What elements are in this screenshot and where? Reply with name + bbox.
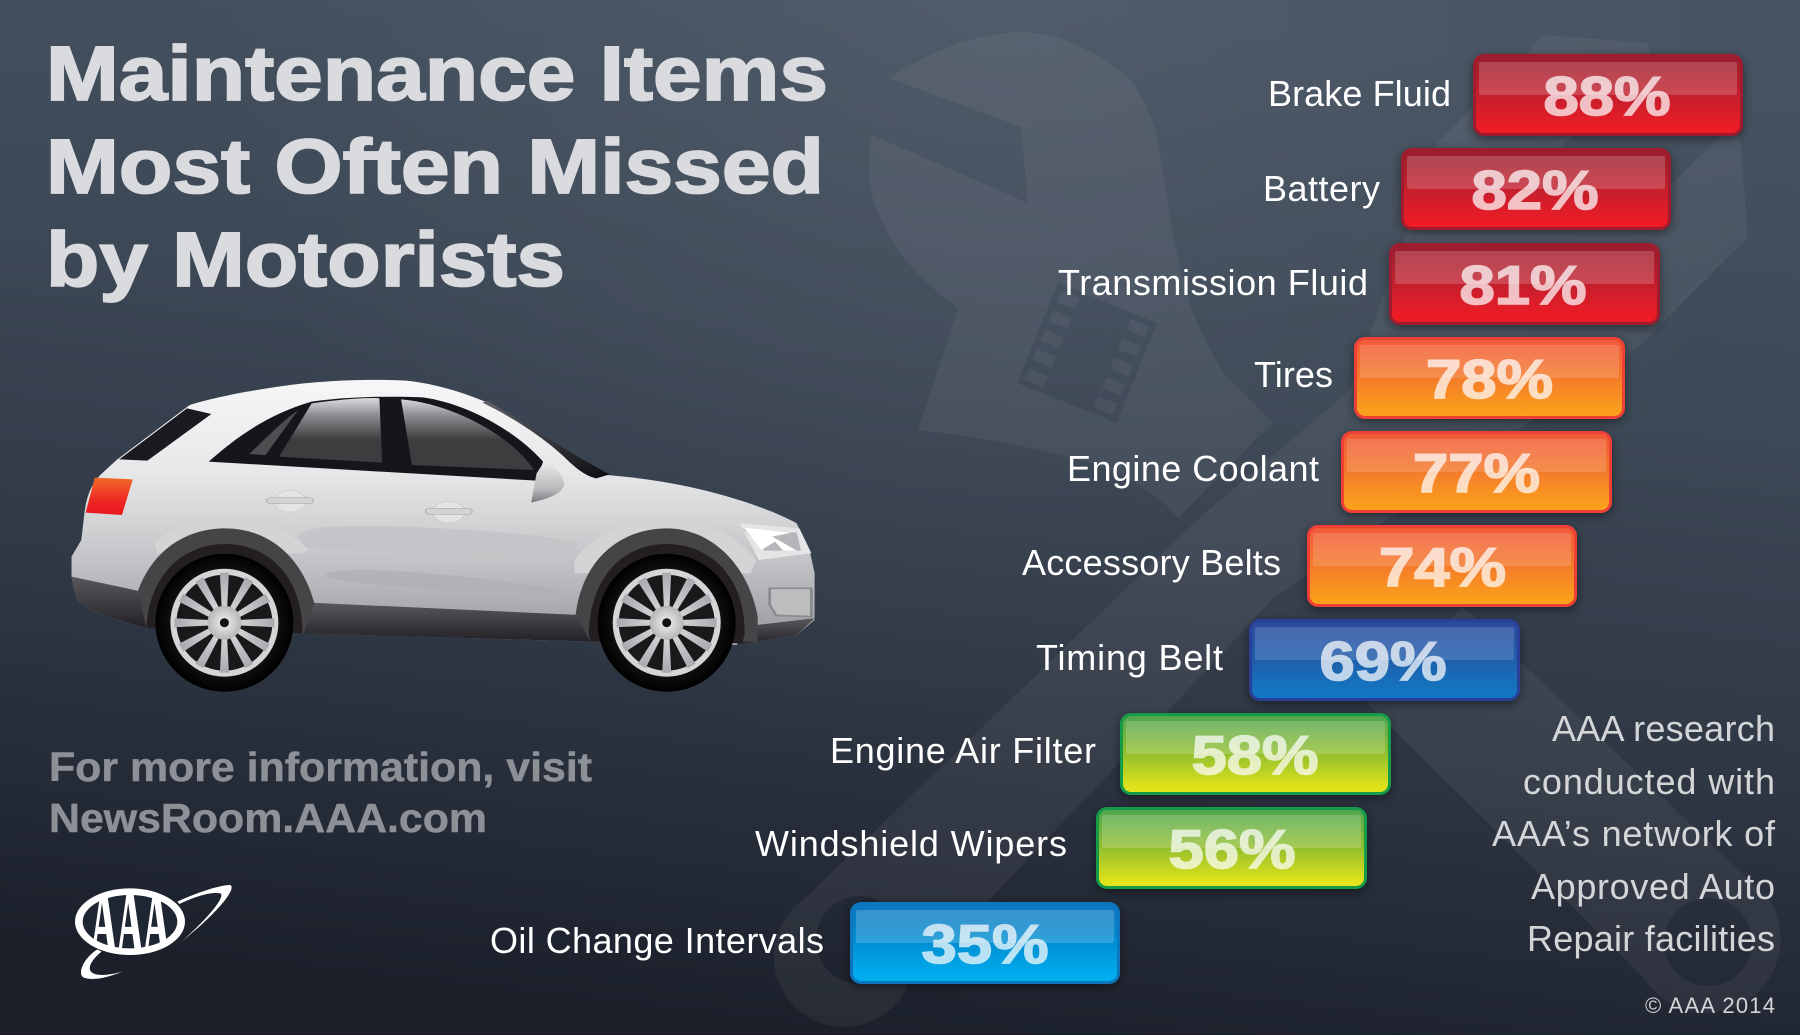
label: Brake Fluid: Brake Fluid	[1268, 73, 1451, 114]
research note: conducted with	[1523, 761, 1775, 802]
bar: Engine Coolant 77%: 77%	[1413, 442, 1540, 504]
label: Timing Belt: Timing Belt	[1036, 637, 1223, 678]
rear and sill shading	[72, 526, 815, 645]
icon: AAA logo	[75, 885, 232, 979]
research note: Repair facilities	[1527, 918, 1775, 959]
bar: Timing Belt 69%: 69%	[1320, 630, 1446, 692]
more information text: NewsRoom.AAA.com	[49, 795, 487, 841]
label: Tires: Tires	[1254, 354, 1333, 395]
side windows	[209, 397, 543, 481]
title	[46, 31, 828, 303]
bar: Battery 82%: 82%	[1472, 159, 1598, 221]
bar: Accessory Belts 74%	[1307, 525, 1577, 607]
bar: Battery 82%	[1401, 148, 1671, 230]
front wheel	[598, 554, 736, 692]
bar: Windshield Wipers 56%	[1096, 807, 1367, 889]
label: Transmission Fluid: Transmission Fluid	[1058, 262, 1368, 303]
bar: Timing Belt 69%	[1249, 619, 1520, 701]
title: Most Often Missed	[46, 124, 824, 210]
rear wheel	[155, 554, 293, 692]
bar: Accessory Belts 74%: 74%	[1379, 536, 1506, 598]
bar: Oil Change Intervals 35%: 35%	[922, 913, 1048, 975]
label: Battery: Battery	[1263, 168, 1380, 209]
bar: Tires 78%: 78%	[1426, 348, 1553, 410]
more information text	[49, 744, 592, 841]
research note: AAA’s network of	[1492, 813, 1776, 854]
door handles	[267, 491, 472, 523]
bar: Engine Air Filter 58%: 58%	[1192, 724, 1318, 786]
bar: Tires 78%	[1354, 337, 1625, 419]
front arch	[575, 520, 758, 643]
car illustration	[72, 380, 815, 692]
headlight	[740, 523, 811, 560]
title: by Motorists	[46, 217, 565, 303]
research note	[1492, 708, 1776, 959]
rear quarter glass	[119, 408, 211, 461]
copyright: © AAA 2014	[1645, 993, 1775, 1018]
bar: Oil Change Intervals 35%	[850, 902, 1120, 984]
research note: AAA research	[1552, 708, 1775, 749]
bar: Transmission Fluid 81%: 81%	[1460, 254, 1586, 316]
bar: Engine Coolant 77%	[1341, 431, 1612, 513]
more information text: For more information, visit	[49, 744, 592, 790]
bar: Brake Fluid 88%: 88%	[1544, 65, 1670, 127]
crossed wrenches watermark	[774, 32, 1781, 1027]
bar: Engine Air Filter 58%	[1120, 713, 1391, 795]
icon: AAA logo: AAA	[91, 868, 169, 975]
label: Engine Coolant: Engine Coolant	[1067, 448, 1319, 489]
bar: Brake Fluid 88%	[1473, 54, 1743, 136]
label: Engine Air Filter: Engine Air Filter	[830, 730, 1096, 771]
side mirror	[531, 461, 564, 503]
label: Windshield Wipers: Windshield Wipers	[755, 823, 1067, 864]
label: Oil Change Intervals: Oil Change Intervals	[490, 920, 824, 961]
tail lamp	[86, 478, 133, 515]
windshield edge	[482, 401, 610, 478]
bar: Windshield Wipers 56%: 56%	[1168, 818, 1296, 880]
bar: Transmission Fluid 81%	[1389, 243, 1660, 325]
fog lamp	[770, 588, 811, 617]
rear arch	[138, 518, 314, 633]
research note: Approved Auto	[1531, 866, 1775, 907]
title: Maintenance Items	[46, 31, 828, 117]
label: Accessory Belts: Accessory Belts	[1022, 542, 1281, 583]
